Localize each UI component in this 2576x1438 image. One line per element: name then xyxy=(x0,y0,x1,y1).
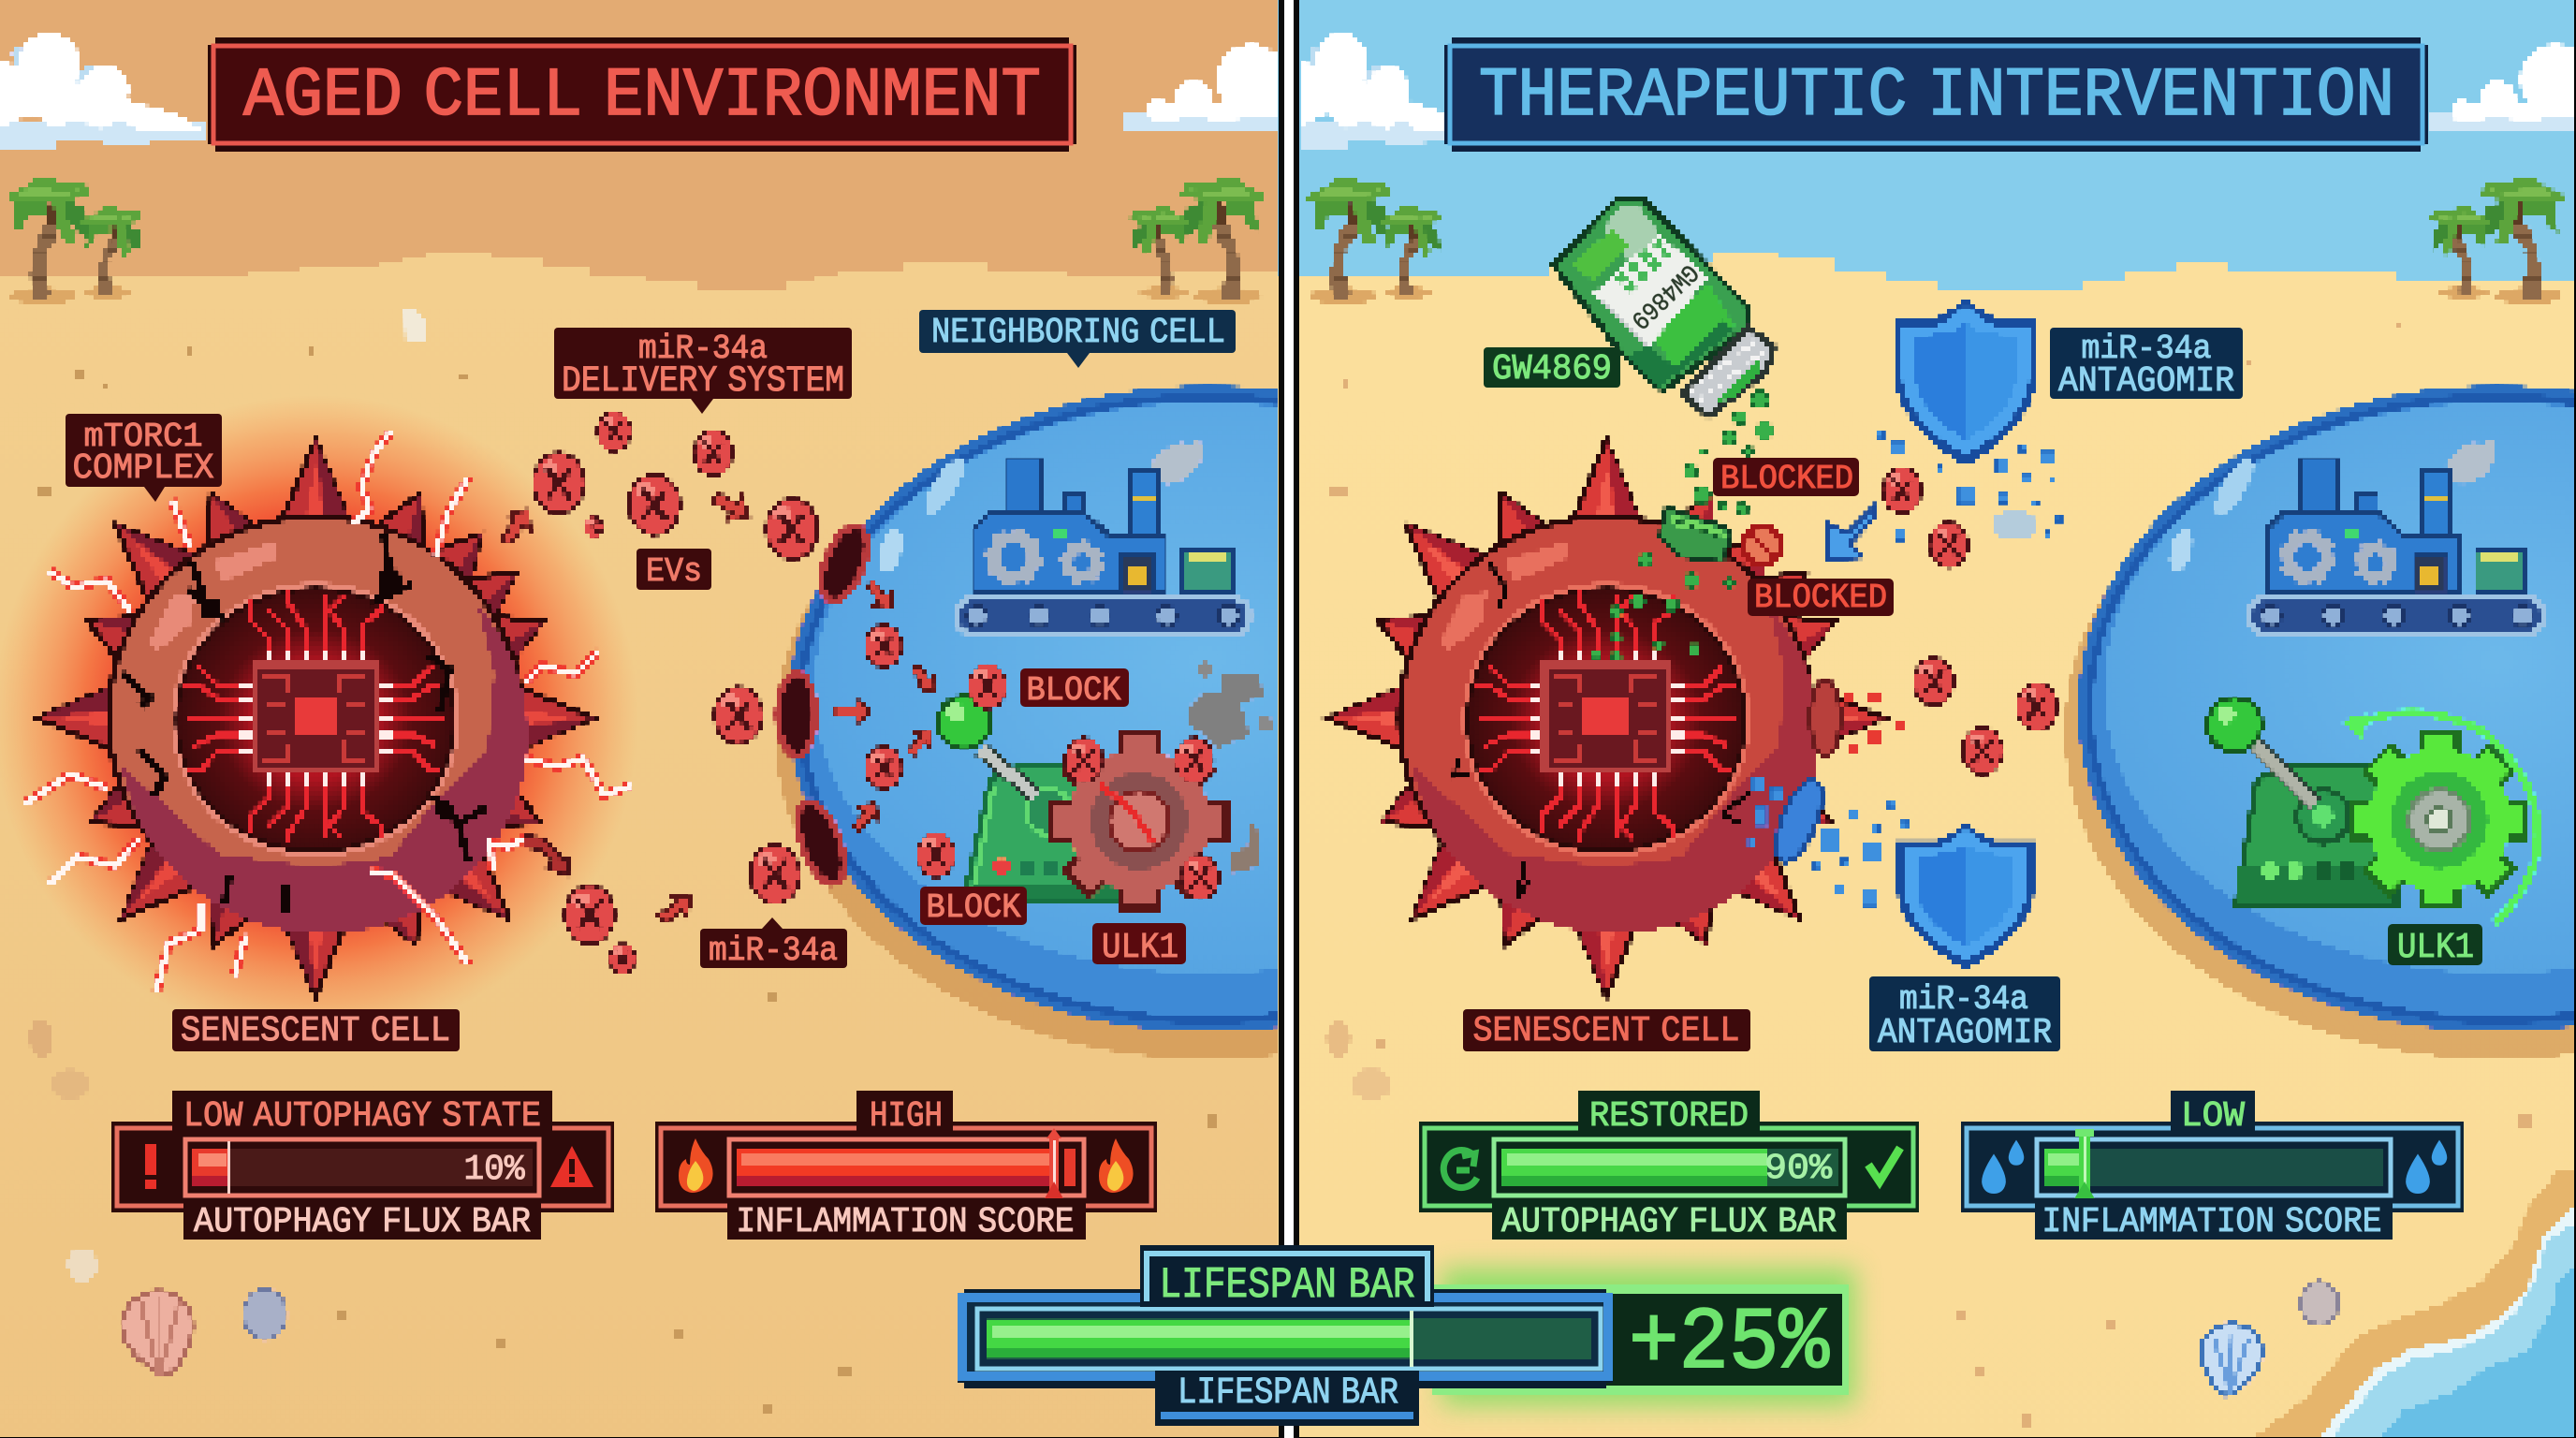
title: therapeutic intervention xyxy=(1444,37,2428,152)
cracks xyxy=(122,534,487,913)
tab: low autophagy state: LOW AUTOPHAGY STATE xyxy=(183,1096,541,1137)
tab: lifespan bar top xyxy=(1140,1245,1434,1310)
label: miR-34a delivery system: miR-34a xyxy=(638,330,768,368)
label: miR-34a delivery system: DELIVERY SYSTEM xyxy=(562,360,844,402)
tab: low xyxy=(2171,1091,2255,1139)
label: senescent cell right: SENESCENT CELL xyxy=(1473,1011,1739,1051)
membrane portals left xyxy=(778,521,876,889)
icon: flame left xyxy=(679,1138,713,1193)
label: ULK1 left: ULK1 xyxy=(1102,928,1178,968)
panel: aged cell environment background xyxy=(0,0,1287,1438)
cracks right xyxy=(1453,562,1756,899)
machine: lever and ULK1 gear left xyxy=(938,662,1273,908)
tab: inflammation score: INFLAMMATION SCORE xyxy=(736,1202,1075,1242)
arrows left xyxy=(495,486,944,930)
label: BLOCKED upper: BLOCKED xyxy=(1720,460,1853,498)
label: BLOCKED lower: BLOCKED xyxy=(1754,579,1887,617)
extracellular vesicles left xyxy=(532,411,1221,975)
inflammation score bar left xyxy=(655,1091,1157,1242)
tab: restored: RESTORED xyxy=(1589,1096,1749,1137)
pebbles left xyxy=(29,1020,97,1282)
label: miR-34a delivery system xyxy=(554,328,852,414)
label: BLOCK upper: BLOCK xyxy=(1026,671,1121,710)
title: aged cell environment xyxy=(208,37,1076,152)
portals right xyxy=(1767,681,1840,867)
pebbles right xyxy=(1326,1020,1392,1100)
autophagy flux bar right xyxy=(1419,1091,1919,1242)
senescent cell red glow xyxy=(0,395,638,1041)
label: miR-34a antagomir top: miR-34a xyxy=(2082,330,2211,368)
neighboring cell left xyxy=(777,384,1278,1058)
shield bottom xyxy=(1897,821,2034,969)
beach water xyxy=(2253,1168,2576,1438)
tab: autophagy flux bar: AUTOPHAGY FLUX BAR xyxy=(194,1202,531,1242)
label: miR-34a antagomir bottom xyxy=(1869,976,2060,1053)
panel: therapeutic intervention background xyxy=(1279,0,2576,1438)
label: senescent cell left: SENESCENT CELL xyxy=(181,1011,450,1051)
icon: flame right xyxy=(1099,1138,1134,1193)
shell right xyxy=(2196,1320,2265,1400)
label: miR-34a antagomir top: ANTAGOMIR xyxy=(2058,361,2234,402)
label: miR-34a xyxy=(700,917,847,970)
fill 90% xyxy=(1501,1149,1767,1186)
fill 10% xyxy=(192,1141,230,1194)
gear: ULK1 inactive xyxy=(1052,734,1226,908)
smoke puff blue xyxy=(1992,510,2037,540)
fill high xyxy=(737,1149,1076,1186)
label: miR-34a antagomir bottom: miR-34a xyxy=(1899,980,2028,1019)
inflammation score bar right xyxy=(1961,1091,2464,1242)
label: mTORC1 complex: COMPLEX xyxy=(73,448,214,489)
tab: low: LOW xyxy=(2181,1096,2245,1137)
tab: lifespan bar bottom xyxy=(1155,1371,1419,1426)
label: miR-34a antagomir top xyxy=(2050,328,2243,402)
bottle label text: GW4869 xyxy=(1624,257,1703,333)
label: ULK1 right: ULK1 xyxy=(2397,928,2474,968)
icon: drops right xyxy=(2406,1140,2447,1194)
gear: ULK1 active xyxy=(2352,733,2526,907)
icon: warning xyxy=(550,1146,593,1187)
label: BLOCK lower: BLOCK xyxy=(927,888,1021,927)
label: mTORC1 complex xyxy=(66,414,222,502)
tab: lifespan bar bottom: LIFESPAN BAR xyxy=(1178,1372,1398,1415)
tab: lifespan bar top: LIFESPAN BAR xyxy=(1159,1261,1415,1310)
icon: drops left xyxy=(1982,1140,2024,1194)
neighboring cell right xyxy=(2065,386,2576,1059)
+25% badge xyxy=(1432,1284,1849,1395)
detached green cap xyxy=(1660,507,1732,562)
tab: inflammation score right: INFLAMMATION SCORE xyxy=(2042,1202,2381,1242)
blocked vesicles right xyxy=(1846,467,2057,775)
autophagy flux bar right: 90% xyxy=(1764,1149,1832,1189)
icon: factory right xyxy=(2247,441,2546,638)
glow arc xyxy=(2355,712,2538,922)
divider xyxy=(1279,0,1299,1438)
senescent cell right xyxy=(1328,440,1884,996)
tab: high: HIGH xyxy=(870,1096,943,1137)
green drug particles xyxy=(1591,391,1773,661)
bottle: GW4869 xyxy=(1554,199,1774,417)
title: therapeutic intervention: THERAPEUTIC INTERVENTION xyxy=(1479,57,2394,135)
label: miR-34a: miR-34a xyxy=(709,932,838,970)
shell left xyxy=(122,1287,197,1376)
lightning xyxy=(24,432,632,992)
tab: autophagy flux bar right: AUTOPHAGY FLUX BAR xyxy=(1501,1202,1837,1242)
shield top xyxy=(1895,296,2037,466)
red particles xyxy=(1846,691,1906,752)
arrow: blue down-left xyxy=(1827,506,1875,559)
icon: exclamation xyxy=(145,1144,156,1189)
glow xyxy=(1442,1269,1855,1405)
+25% badge: +25% xyxy=(1629,1295,1830,1394)
label: miR-34a antagomir bottom: ANTAGOMIR xyxy=(1878,1013,2052,1053)
autophagy flux bar left: 10% xyxy=(464,1150,525,1190)
autophagy flux bar left xyxy=(111,1091,614,1242)
title: aged cell environment: AGED CELL ENVIRONMENT xyxy=(243,57,1041,135)
crack blotches xyxy=(199,567,454,819)
lifespan bar xyxy=(958,1245,1855,1426)
senescent cell left xyxy=(24,432,632,996)
smoke dark xyxy=(1189,672,1264,749)
label: neighboring cell: NEIGHBORING CELL xyxy=(931,313,1225,353)
label: EVs: EVs xyxy=(646,552,702,591)
fill xyxy=(987,1311,1413,1367)
label: mTORC1 complex: mTORC1 xyxy=(84,418,202,456)
scene artwork xyxy=(24,199,2576,1059)
icon: check xyxy=(1868,1148,1900,1181)
icon: prohibition xyxy=(1744,527,1781,565)
machine: lever and activated ULK1 gear right xyxy=(2207,697,2538,922)
marker xyxy=(1043,1128,1065,1202)
marker xyxy=(2072,1129,2097,1202)
blue antagomir particles xyxy=(1749,431,2061,906)
label: neighboring cell xyxy=(919,310,1236,368)
icon: recycle xyxy=(1443,1151,1477,1188)
fill low xyxy=(2044,1149,2080,1186)
icon: factory xyxy=(953,441,1252,638)
label: GW4869: GW4869 xyxy=(1492,349,1612,389)
